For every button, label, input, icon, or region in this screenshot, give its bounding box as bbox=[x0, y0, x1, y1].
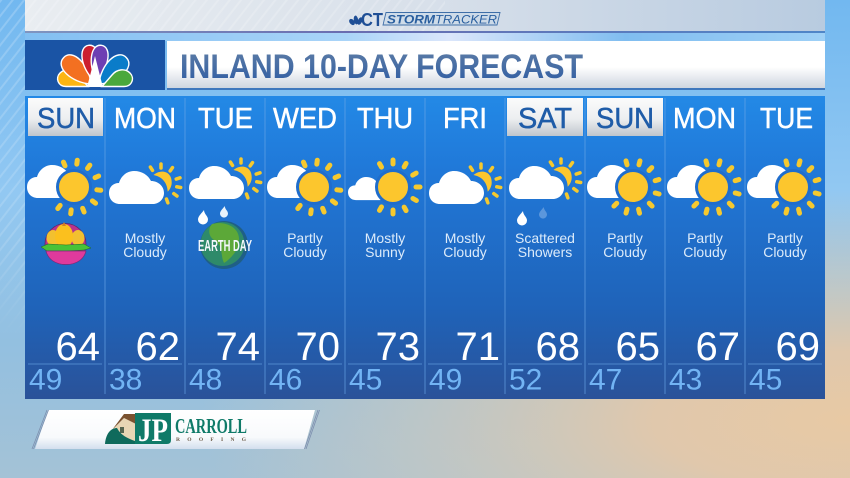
day 1: Sunday: SUN bbox=[37, 103, 95, 135]
day 3: Tuesday bbox=[189, 103, 261, 396]
day 2: Monday: MON bbox=[114, 103, 176, 135]
condition text: Partly bbox=[767, 230, 803, 246]
condition text: Cloudy bbox=[283, 244, 327, 260]
day 6: Friday: FRI bbox=[443, 103, 487, 135]
day 7: Saturday bbox=[507, 98, 583, 396]
StormTracker station logo: CT bbox=[361, 10, 383, 30]
day 1: Sunday: 49 bbox=[29, 364, 62, 396]
icon: earth day globe bbox=[198, 221, 252, 269]
day 5: Thursday bbox=[348, 103, 423, 396]
icon: mostly cloudy bbox=[109, 164, 181, 204]
day 2: Monday: 62 bbox=[136, 325, 180, 369]
day 8: Sunday: SUN bbox=[596, 103, 654, 135]
condition text: Cloudy bbox=[603, 244, 647, 260]
NBC logo panel bbox=[25, 40, 165, 91]
day 5: Thursday: 73 bbox=[376, 325, 420, 369]
icon: mostly sunny bbox=[348, 157, 423, 216]
condition text: Partly bbox=[687, 230, 723, 246]
JP Carroll logo bbox=[135, 413, 247, 449]
day 8: Sunday: 47 bbox=[589, 364, 622, 396]
icon: partly cloudy bbox=[267, 160, 341, 214]
day 7: Saturday: 68 bbox=[536, 325, 580, 369]
day 2: Monday: 38 bbox=[109, 364, 142, 396]
day 9: Monday: MON bbox=[673, 103, 736, 135]
day 4: Wednesday: 46 bbox=[269, 364, 302, 396]
day 7: Saturday: SAT bbox=[518, 103, 572, 135]
icon: mostly cloudy bbox=[429, 164, 501, 204]
condition text: Cloudy bbox=[763, 244, 807, 260]
sponsor banner bbox=[32, 410, 320, 449]
day 1: Sunday bbox=[27, 98, 103, 396]
condition text: Partly bbox=[607, 230, 643, 246]
condition text: Showers bbox=[518, 244, 572, 260]
day 6: Friday: 71 bbox=[456, 325, 500, 369]
day 3: Tuesday: 48 bbox=[189, 364, 222, 396]
condition text: Mostly bbox=[445, 230, 485, 246]
StormTracker station logo: TRACKER bbox=[435, 14, 497, 26]
JP Carroll logo: JP bbox=[138, 413, 168, 449]
day 5: Thursday: THU bbox=[357, 103, 413, 135]
day 3: Tuesday: 74 bbox=[216, 325, 260, 369]
day 8: Sunday: 65 bbox=[616, 325, 660, 369]
condition text: Cloudy bbox=[683, 244, 727, 260]
day 9: Monday bbox=[667, 103, 743, 396]
day 4: Wednesday: 70 bbox=[296, 325, 340, 369]
day 6: Friday: 49 bbox=[429, 364, 462, 396]
icon: scattered showers bbox=[509, 159, 581, 226]
day 9: Monday: 43 bbox=[669, 364, 702, 396]
icon: partly cloudy bbox=[747, 158, 823, 217]
forecast panel bbox=[25, 96, 825, 399]
day 10: Tuesday: TUE bbox=[760, 103, 813, 135]
condition text: Mostly bbox=[365, 230, 405, 246]
condition text: Mostly bbox=[125, 230, 165, 246]
condition text: Cloudy bbox=[123, 244, 167, 260]
condition text: Scattered bbox=[515, 230, 575, 246]
day 6: Friday bbox=[429, 103, 501, 396]
icon: house bbox=[105, 414, 136, 444]
day 8: Sunday bbox=[587, 98, 663, 396]
day 10: Tuesday: 69 bbox=[776, 325, 820, 369]
day 7: Saturday: 52 bbox=[509, 364, 542, 396]
icon: easter chick basket bbox=[41, 222, 91, 264]
icon: peacock bbox=[57, 44, 133, 91]
day 4: Wednesday: WED bbox=[273, 103, 337, 135]
day 4: Wednesday bbox=[267, 103, 341, 396]
condition text: Partly bbox=[287, 230, 323, 246]
StormTracker station logo bbox=[348, 10, 500, 30]
condition text: Sunny bbox=[365, 244, 405, 260]
JP Carroll logo: ROOFING bbox=[176, 437, 247, 443]
icon: partly cloudy bbox=[587, 158, 663, 217]
day 1: Sunday: 64 bbox=[56, 325, 100, 369]
JP Carroll logo: CARROLL bbox=[175, 414, 247, 438]
day 2: Monday bbox=[109, 103, 181, 396]
icon: partly cloudy bbox=[667, 158, 743, 217]
day 9: Monday: 67 bbox=[696, 325, 740, 369]
icon: partly cloudy bbox=[27, 160, 101, 214]
icon: earth day globe: EARTH DAY bbox=[198, 238, 252, 255]
day 10: Tuesday: 45 bbox=[749, 364, 782, 396]
day 5: Thursday: 45 bbox=[349, 364, 382, 396]
day 3: Tuesday: TUE bbox=[198, 103, 253, 135]
StormTracker station logo: STORM bbox=[387, 14, 435, 26]
title bar bbox=[167, 41, 825, 90]
top header bar bbox=[25, 0, 825, 33]
day 10: Tuesday bbox=[747, 103, 823, 396]
icon: showers bbox=[189, 159, 261, 224]
light strip under header bbox=[25, 33, 825, 41]
condition text: Cloudy bbox=[443, 244, 487, 260]
title: INLAND 10-DAY FORECAST bbox=[180, 48, 583, 86]
